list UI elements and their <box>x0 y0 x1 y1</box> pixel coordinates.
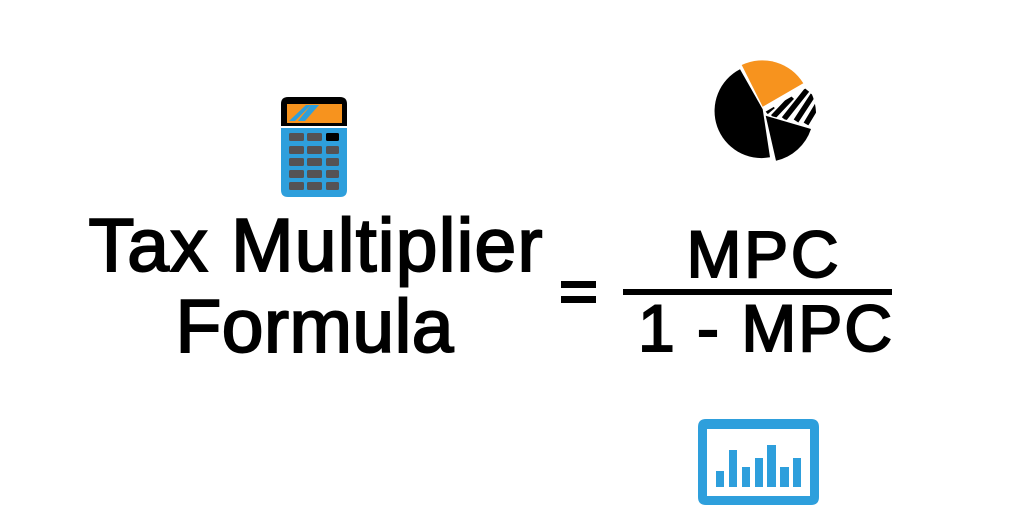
formula numerator: MPC <box>686 217 838 291</box>
formula denominator: 1 - MPC <box>638 291 892 365</box>
equals sign <box>561 281 596 303</box>
icon: pie chart <box>715 60 818 161</box>
fraction bar <box>623 289 892 295</box>
title: Tax Multiplier Formula: Tax Multiplier <box>88 203 542 287</box>
title: Tax Multiplier Formula: Formula <box>176 284 454 368</box>
title: Tax Multiplier Formula <box>88 203 542 368</box>
icon: bar chart panel <box>698 419 819 505</box>
icon: calculator <box>281 97 347 197</box>
